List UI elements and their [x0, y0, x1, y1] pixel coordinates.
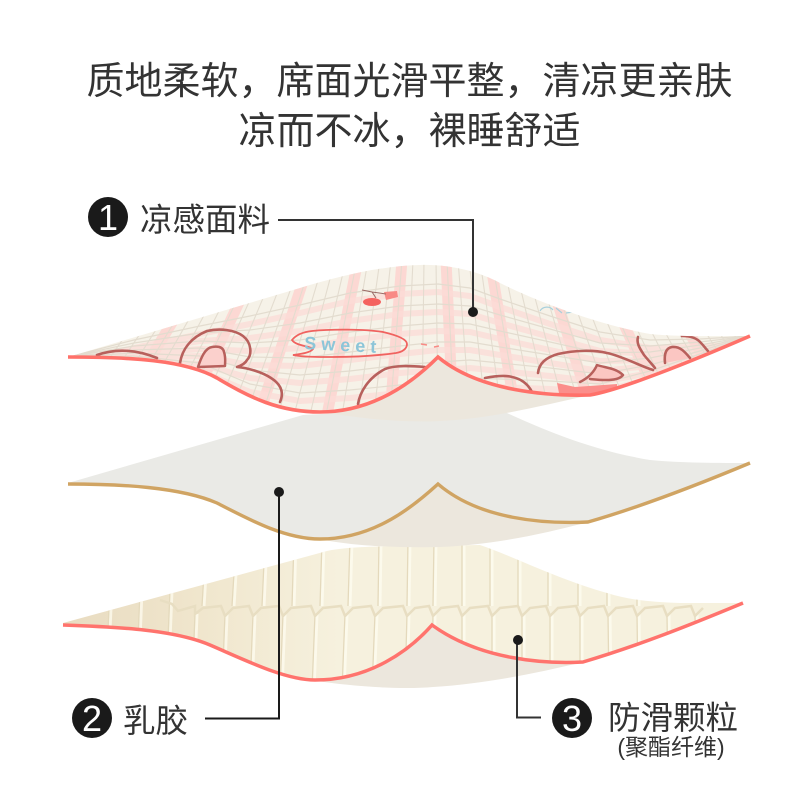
cherry motif	[362, 290, 398, 306]
layer 3 surface	[63, 545, 738, 678]
title	[86, 61, 733, 153]
callout 3: anti-slip particles	[513, 635, 738, 760]
leader line 2	[205, 487, 284, 718]
layer 2 surface	[68, 410, 750, 539]
leader line 3	[513, 635, 541, 718]
callout 2: latex	[72, 487, 284, 739]
layer 2 gold edge	[68, 463, 750, 539]
layer 2: latex	[68, 410, 750, 547]
layer 1: cooling fabric	[60, 260, 790, 421]
layer 3: anti-slip particles	[55, 540, 755, 690]
number badge 2: 2	[82, 698, 102, 739]
layer 1 underside	[300, 350, 590, 421]
number badge 1: 1	[98, 197, 118, 238]
number badge 2	[72, 698, 112, 739]
fabric motifs: rabbits and sheep	[97, 330, 708, 404]
title: 凉而不冰，裸睡舒适	[238, 111, 581, 153]
leader line 1	[278, 220, 478, 317]
number badge 1	[88, 197, 128, 238]
number badge 3: 3	[562, 698, 582, 739]
blue doodle	[540, 307, 573, 313]
layer 2 underside	[320, 480, 588, 547]
callout 1: cooling fabric	[88, 197, 478, 317]
layer 1 surface	[74, 264, 746, 410]
layer 1 coral edge	[68, 336, 750, 412]
label 1 text: 凉感面料	[140, 202, 270, 238]
label 3 text: 防滑颗粒	[608, 700, 738, 736]
sweet speech bubble	[292, 330, 439, 357]
label 3 subtext: (聚酯纤维)	[617, 734, 725, 760]
layer 3 coral edge	[63, 603, 743, 680]
sheep bow	[557, 383, 617, 394]
number badge 3	[552, 698, 592, 739]
label 2 text: 乳胶	[123, 703, 188, 739]
title: 质地柔软，席面光滑平整，清凉更亲肤	[86, 61, 733, 103]
sweet speech bubble: Sweet	[304, 333, 382, 357]
layer 3 underside	[317, 620, 583, 688]
